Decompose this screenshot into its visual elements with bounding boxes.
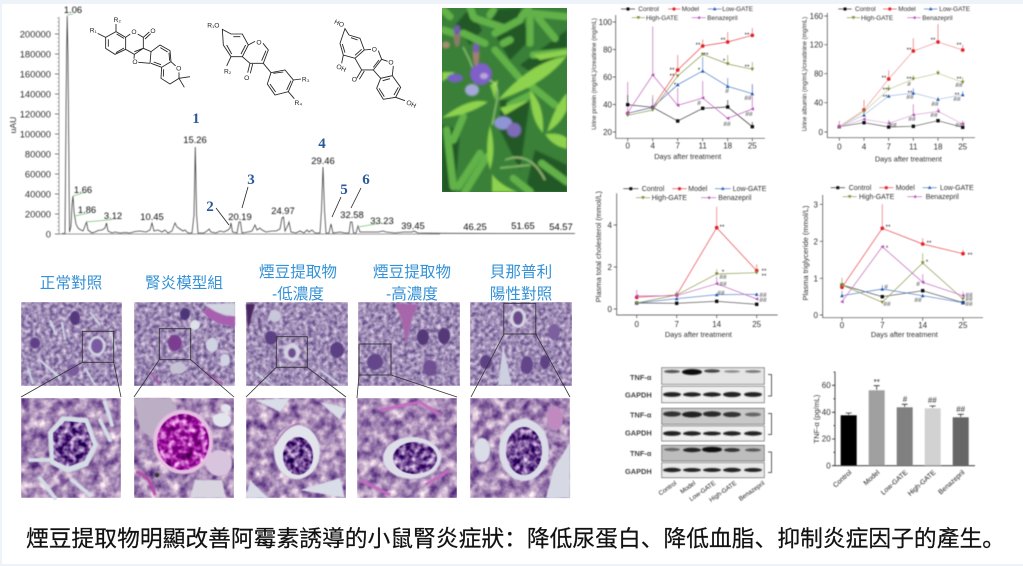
peak labels: 54.57	[549, 221, 573, 232]
legend	[623, 186, 767, 202]
tick labels: 7	[880, 321, 885, 330]
y axis title: TNF-α (pg/mL)	[812, 395, 821, 443]
dark foliage	[442, 8, 567, 192]
legend: High-GATE	[646, 15, 678, 22]
significance marks: **	[930, 37, 936, 44]
tick labels: 0	[814, 311, 819, 320]
significance marks: ##	[965, 296, 973, 303]
structure 2 atom labels: R₄	[295, 100, 302, 107]
significance marks: *	[723, 58, 726, 65]
integration marks	[67, 14, 382, 227]
significance marks: **	[954, 92, 960, 99]
significance marks: **	[906, 76, 912, 83]
bar labels: Control	[832, 469, 854, 489]
tick labels: 7	[675, 142, 680, 150]
bar labels: High-GATE	[907, 469, 938, 498]
bars	[841, 415, 857, 465]
legend: Control	[638, 6, 659, 13]
significance marks: #	[725, 88, 729, 95]
group headings: 正常對照	[40, 274, 102, 292]
legend: Model	[896, 185, 915, 192]
structure 3 atom labels: OH	[405, 99, 417, 110]
blot labels: TNF-α	[630, 449, 652, 458]
tick labels: 25	[958, 142, 968, 152]
blot labels: TNF-α	[630, 410, 652, 420]
axis titles: Days after treatment	[665, 330, 732, 339]
legend: Benazepril	[707, 15, 738, 22]
legend: Benazepril	[718, 195, 752, 202]
group headings: 陽性對照	[490, 285, 552, 303]
blot labels: GAPDH	[625, 428, 652, 438]
compound peak numbers and leader lines: 2	[206, 199, 214, 215]
chart: plasma triglyceride	[801, 185, 983, 339]
tick labels: 0	[634, 320, 639, 329]
legend	[838, 6, 970, 22]
tick labels	[810, 12, 968, 152]
significance marks: **	[881, 75, 887, 82]
y axis tick labels: 120000	[20, 108, 51, 120]
lane labels: Low-GATE	[688, 480, 717, 503]
legend: Benazepril	[922, 15, 953, 22]
tick labels: 0	[826, 462, 831, 470]
panel: low dose histology	[246, 302, 348, 498]
peak labels: 1.66	[74, 184, 92, 195]
chart: urine protein: Urine protein (mg/mL)/creatinine (mg/mL)	[591, 18, 598, 130]
group headings: -低濃度	[272, 285, 324, 303]
error bars	[628, 26, 752, 113]
tick labels: 40	[603, 100, 613, 110]
peak labels: 1.06	[64, 4, 82, 15]
significance marks: ##	[955, 122, 963, 129]
chemical structure 2	[207, 22, 310, 107]
tick labels: 4	[650, 142, 655, 150]
y axis tick labels	[20, 28, 51, 240]
significance marks: **	[907, 90, 913, 97]
significance marks: **	[882, 87, 888, 94]
structure 1 atom labels: O	[131, 29, 137, 36]
significance marks: ##	[955, 82, 963, 89]
significance marks: #	[884, 284, 888, 291]
structure 3 atom labels: OH	[335, 63, 347, 74]
significance marks: ##	[883, 301, 891, 308]
tick labels: 0	[625, 142, 630, 150]
chromatogram chart	[8, 4, 575, 240]
significance marks: ##	[744, 95, 752, 102]
tick labels: 40	[814, 99, 824, 108]
significance marks: **	[906, 47, 912, 54]
significance marks: **	[744, 32, 750, 39]
y axis title: uAU	[8, 117, 18, 133]
significance marks: **	[874, 378, 880, 387]
legend: Model	[688, 186, 708, 193]
significance marks: ##	[745, 111, 753, 118]
structure 2 atom labels: R₂	[224, 68, 232, 75]
peak labels: 32.58	[340, 209, 364, 220]
chart: urine protein	[591, 6, 765, 161]
chart: urine albumin: Urine albumin (mg/mL)/creatinine (mg/mL)	[802, 17, 808, 131]
peak labels: 29.46	[311, 155, 335, 166]
significance marks: *	[722, 269, 725, 276]
tick labels: 80	[603, 46, 613, 54]
legend: Model	[898, 6, 916, 13]
structure 3 atom labels: HO	[333, 19, 345, 29]
tick labels: 60	[603, 73, 613, 82]
significance marks: *	[886, 245, 889, 252]
legend: Low-GATE	[722, 6, 753, 13]
peak labels: 3.12	[104, 210, 122, 221]
significance marks: ##	[719, 281, 727, 288]
significance marks: **	[956, 42, 962, 49]
blot labels: GAPDH	[625, 390, 652, 400]
significance marks: #	[903, 395, 908, 404]
western blot panel	[625, 368, 772, 504]
plant photograph	[442, 7, 567, 192]
group headings: 煙豆提取物	[259, 263, 337, 281]
panel: nephritis model histology	[134, 302, 235, 498]
chart: urine albumin	[802, 6, 975, 164]
significance marks: ##	[931, 101, 939, 108]
axis titles: Days after treatment	[654, 152, 721, 161]
conclusion caption: 煙豆提取物明顯改善阿霉素誘導的小鼠腎炎症狀：降低尿蛋白、降低血脂、抑制炎症因子的產生。	[26, 526, 1005, 552]
significance marks: ##	[956, 405, 966, 414]
bar labels: Low-GATE	[880, 469, 910, 497]
flowers	[470, 63, 492, 85]
significance marks: **	[761, 268, 767, 275]
tick labels: 11	[699, 142, 707, 150]
peak labels: 15.26	[183, 134, 207, 145]
tick labels: 100	[599, 18, 613, 27]
lane labels: High-GATE	[708, 480, 738, 504]
tick labels: 3	[814, 200, 819, 209]
chart: plasma total cholesterol	[594, 186, 778, 339]
significance marks: ##	[953, 96, 961, 103]
mid green leaves	[443, 7, 567, 192]
legend: High-GATE	[859, 194, 895, 201]
bar labels: Model	[863, 469, 882, 487]
group headings: 腎炎模型組	[145, 274, 223, 292]
tick labels: 0	[837, 142, 842, 152]
tick labels: 160	[810, 12, 824, 21]
tick labels: 80	[814, 70, 824, 79]
y axis tick labels: 160000	[20, 68, 51, 80]
lane labels: Benazepril	[738, 480, 766, 503]
significance marks: ##	[717, 290, 725, 297]
tick labels	[599, 18, 757, 150]
peak labels: 1.86	[78, 204, 96, 215]
significance marks	[669, 32, 753, 128]
chart: plasma triglyceride: Plasma triglyceride (mmol/L)	[801, 205, 810, 301]
tick labels: 2	[608, 263, 613, 272]
tick labels: 0	[819, 128, 824, 137]
legend	[831, 185, 974, 201]
legend: Low-GATE	[940, 185, 974, 192]
significance marks: ##	[930, 112, 938, 119]
significance marks: **	[703, 52, 709, 59]
legend: Control	[855, 6, 876, 13]
tick labels	[814, 200, 968, 330]
y axis tick labels: 100000	[20, 128, 51, 140]
structure 1 atom labels: O	[176, 66, 181, 73]
tick labels: 2	[814, 237, 819, 246]
error bars	[882, 204, 963, 254]
lane labels	[657, 480, 766, 504]
structure 1 atom labels: O	[132, 59, 138, 66]
structure 2 atom labels: R₁O	[207, 22, 219, 29]
significance marks: ##	[889, 122, 897, 129]
lane labels: Control	[657, 480, 678, 497]
group headings	[40, 263, 552, 303]
legend: Control	[642, 186, 665, 193]
significance marks: **	[669, 73, 675, 80]
significance marks: **	[956, 76, 962, 83]
blot frames	[662, 368, 764, 478]
peak labels	[64, 4, 573, 232]
legend: Model	[682, 6, 699, 13]
structure 2 atom labels: R₃	[302, 77, 310, 84]
group headings: -高濃度	[386, 285, 438, 303]
significance marks	[717, 224, 767, 304]
legend: Benazepril	[926, 194, 959, 201]
structure 2 atom labels	[207, 22, 310, 107]
tick labels: 18	[934, 142, 943, 152]
tick labels: 14	[712, 320, 722, 329]
tick labels: 11	[909, 142, 918, 152]
y axis tick labels: 60000	[25, 168, 51, 180]
error bars	[846, 386, 964, 417]
series lines	[839, 121, 963, 127]
peak labels: 20.19	[228, 211, 252, 222]
chemical structure 1	[90, 17, 190, 87]
compound peak numbers and leader lines: 6	[362, 172, 370, 188]
tick labels: 18	[723, 142, 733, 150]
significance marks: #	[697, 100, 701, 107]
legend	[621, 6, 753, 22]
peak labels: 33.23	[370, 215, 394, 226]
structure 3 atom labels	[333, 19, 417, 110]
bar chart: TNF-alpha	[812, 372, 975, 498]
significance marks: **	[885, 224, 891, 231]
bar labels	[832, 469, 967, 498]
significance marks: ##	[965, 301, 973, 308]
peak labels: 39.45	[401, 220, 425, 231]
panel: benazepril histology	[470, 302, 572, 498]
significance marks: **	[744, 64, 750, 71]
tick labels: 120	[810, 41, 824, 50]
structure 3 atom labels: O	[372, 47, 377, 54]
tick labels: 4	[608, 221, 613, 230]
axis titles: Days after treatment	[871, 330, 938, 339]
compound peak numbers and leader lines: 5	[340, 182, 348, 198]
legend: High-GATE	[861, 15, 893, 22]
compound peak numbers and leader lines	[192, 111, 370, 225]
significance marks: **	[669, 67, 675, 74]
series lines	[628, 105, 752, 127]
bright leaves	[442, 50, 567, 192]
legend: High-GATE	[652, 195, 687, 202]
tick labels: 0	[840, 321, 845, 330]
legend: Low-GATE	[733, 186, 767, 193]
tick labels: 14	[918, 321, 928, 330]
y axis tick labels: 200000	[20, 28, 51, 40]
series lines	[637, 301, 757, 304]
significance marks: **	[720, 37, 726, 44]
y axis tick labels: 40000	[25, 188, 51, 200]
significance marks: *	[674, 82, 677, 89]
axis titles: Days after treatment	[875, 154, 942, 164]
significance marks: ##	[908, 116, 916, 123]
significance marks: ##	[719, 274, 727, 281]
significance marks: #	[916, 281, 920, 288]
peak labels: 46.25	[463, 221, 487, 232]
significance marks: **	[882, 94, 888, 101]
blot labels: TNF-α	[630, 373, 652, 382]
significance marks: ##	[914, 297, 922, 304]
tick labels: 1	[814, 274, 819, 283]
chemical structure 3	[333, 19, 417, 110]
structure 1 atom labels	[90, 17, 181, 73]
tick labels: 0	[608, 305, 613, 314]
legend: Low-GATE	[939, 6, 970, 13]
tick labels: 20	[603, 128, 613, 137]
significance marks: **	[719, 224, 725, 231]
compound peak numbers and leader lines: 3	[247, 172, 255, 188]
structure 1 atom labels: O	[150, 28, 156, 35]
significance marks	[883, 224, 973, 308]
panel: normal control histology	[21, 302, 122, 498]
peak labels: 24.97	[271, 205, 295, 216]
tick labels	[608, 221, 762, 329]
blot labels	[625, 373, 652, 476]
series lines	[842, 285, 963, 303]
brackets	[768, 374, 772, 472]
structure 2 atom labels: O	[256, 40, 262, 47]
chart: plasma total cholesterol: Plasma total cholesterol (mmol/L)	[594, 191, 603, 302]
tick labels: 7	[674, 320, 679, 329]
significance marks: ##	[759, 297, 767, 304]
tick labels: 20	[822, 435, 831, 444]
error bars	[717, 207, 757, 271]
significance marks: ##	[723, 121, 731, 128]
y axis tick labels: 0	[46, 228, 51, 240]
structure 3 atom labels: O	[388, 60, 394, 67]
lane labels: Model	[679, 480, 697, 495]
significance marks: **	[967, 252, 973, 259]
chromatogram trace	[62, 16, 575, 234]
tick labels: 7	[886, 142, 891, 152]
panel: high dose histology	[357, 302, 460, 498]
structure 3 atom labels: O	[352, 76, 357, 83]
tick labels: 60	[822, 381, 831, 390]
significance marks: **	[695, 42, 701, 49]
compound peak numbers and leader lines: 4	[318, 136, 326, 152]
significance marks: **	[761, 273, 767, 280]
significance marks: ##	[759, 292, 767, 299]
significance marks	[881, 37, 963, 129]
significance marks: *	[926, 259, 929, 266]
group headings: 煙豆提取物	[373, 263, 451, 281]
stems	[463, 47, 545, 180]
tick labels: 40	[822, 408, 831, 417]
y axis tick labels: 20000	[25, 208, 51, 220]
y axis tick labels: 80000	[25, 148, 51, 160]
y axis tick labels: 180000	[20, 48, 51, 60]
peak labels: 10.45	[140, 211, 164, 222]
significance marks: *	[698, 67, 701, 74]
protein bands	[663, 369, 762, 472]
tick labels: 25	[748, 142, 757, 150]
peak labels: 51.65	[511, 220, 535, 231]
error bars	[864, 24, 963, 110]
structure 2 atom labels: O	[244, 75, 249, 82]
blot labels: GAPDH	[625, 467, 652, 476]
group headings: 貝那普利	[490, 263, 552, 281]
significance marks: ##	[928, 396, 937, 405]
y axis tick labels: 140000	[20, 88, 51, 100]
tick labels	[822, 381, 831, 470]
bar labels: Benazepril	[937, 469, 967, 496]
tick labels: 4	[862, 142, 867, 152]
significance marks: ##	[906, 94, 914, 101]
significance marks: ##	[965, 292, 973, 299]
legend: Control	[849, 185, 872, 192]
tick labels: 25	[752, 320, 762, 329]
tick labels: 25	[959, 321, 968, 330]
structure 1 atom labels: R₁	[90, 28, 98, 35]
compound peak numbers and leader lines: 1	[192, 111, 200, 127]
significance marks: **	[926, 240, 932, 247]
significance marks	[874, 378, 966, 414]
significance marks: #	[907, 81, 911, 88]
structure 1 atom labels: R₂	[114, 17, 121, 24]
